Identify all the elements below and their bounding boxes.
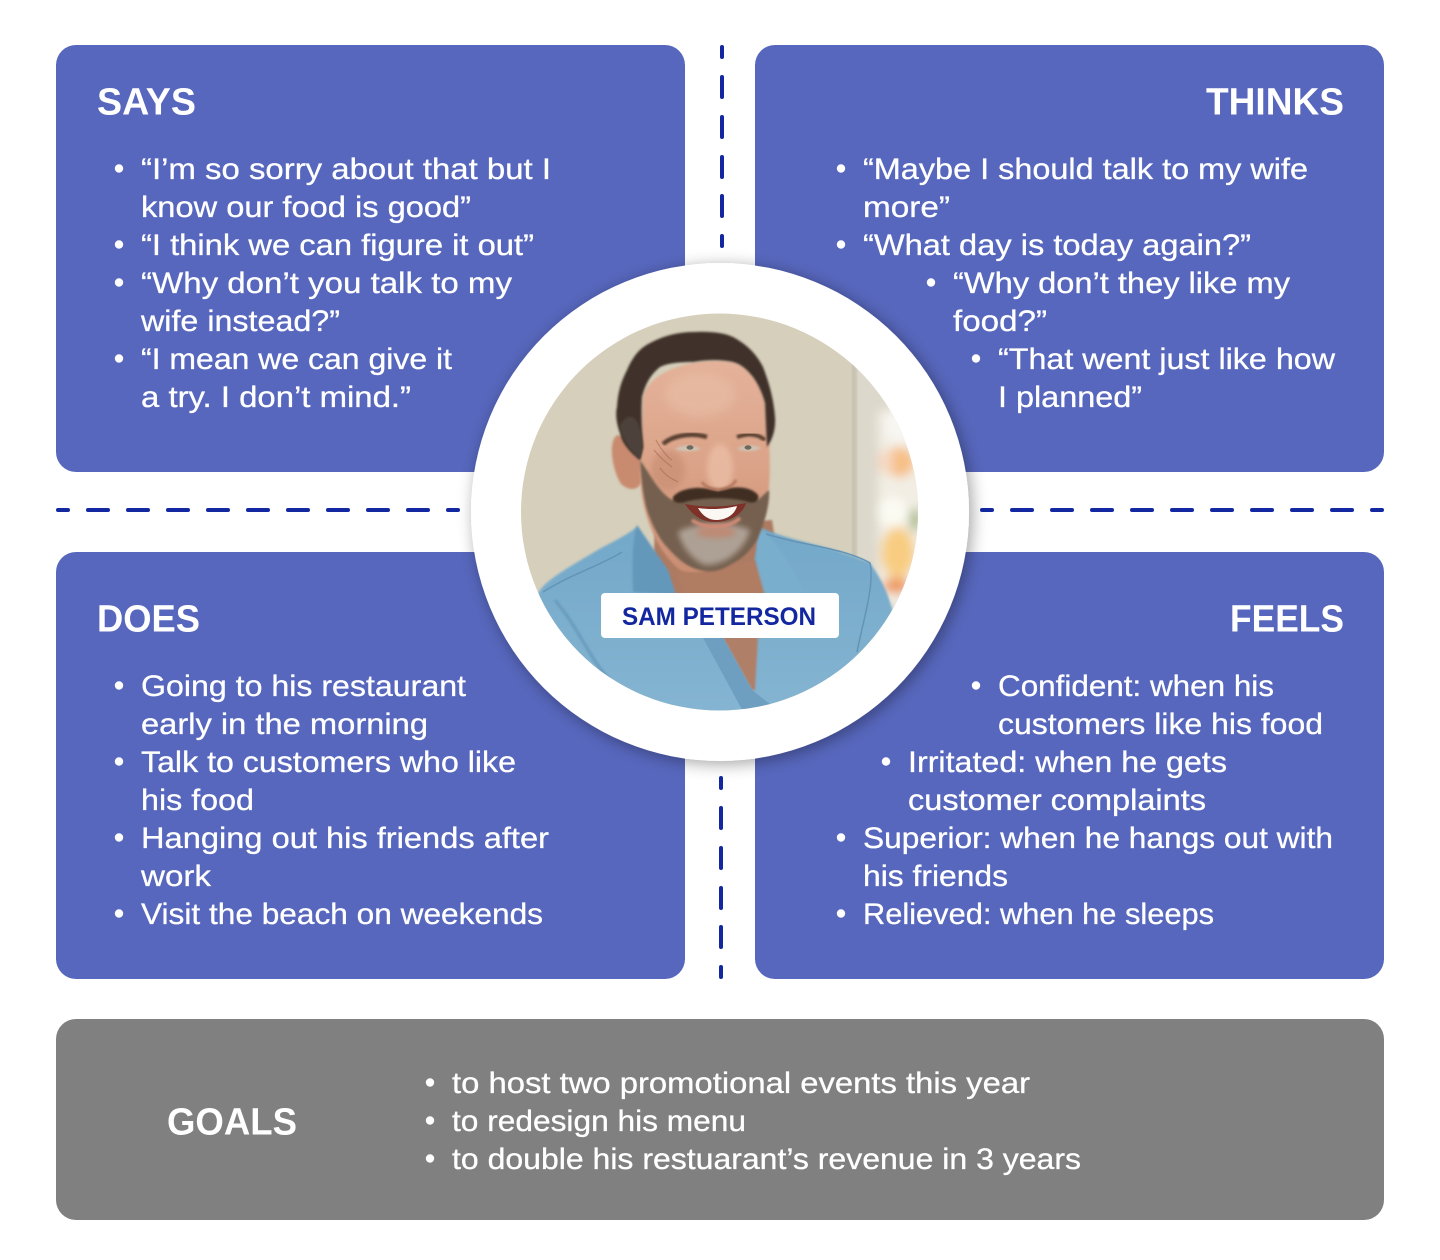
heading: says: SAYS xyxy=(97,82,196,124)
list: does items: Talk to customers who like xyxy=(141,746,516,779)
face xyxy=(640,361,770,572)
name label xyxy=(601,593,839,638)
list: says quotes: wife instead?” xyxy=(140,305,340,338)
heading: does: DOES xyxy=(97,598,200,640)
list: does items: Going to his restaurant xyxy=(141,670,467,703)
list: does items: work xyxy=(140,860,212,893)
list: feels items xyxy=(837,670,1333,931)
list: feels items: Irritated: when he gets xyxy=(908,746,1227,779)
divider: horizontal dashes left xyxy=(56,508,460,512)
panel: goals xyxy=(56,1019,1384,1220)
shirt xyxy=(537,527,896,720)
list: says quotes: a try. I don’t mind.” xyxy=(141,381,411,414)
list: thinks quotes: “Maybe I should talk to my wife xyxy=(863,153,1308,186)
beard xyxy=(640,460,769,571)
mouth xyxy=(685,503,746,522)
list: does items: early in the morning xyxy=(141,708,428,741)
divider: horizontal dashes right xyxy=(980,508,1384,512)
nose xyxy=(702,480,736,489)
list: feels items: customers like his food xyxy=(998,708,1323,741)
list: feels items: Confident: when his xyxy=(998,670,1274,703)
list: says quotes: “I mean we can give it xyxy=(141,343,453,376)
hair xyxy=(616,332,775,460)
panel: thinks xyxy=(755,45,1384,472)
list: says quotes: “I’m so sorry about that but I xyxy=(141,153,551,186)
list: thinks quotes: “What day is today again?” xyxy=(863,229,1251,262)
divider: vertical dashes bottom xyxy=(719,776,723,979)
panel: does xyxy=(56,552,685,979)
list: thinks quotes: I planned” xyxy=(998,381,1142,414)
list: says quotes xyxy=(115,153,551,414)
eyes and brows xyxy=(663,435,707,444)
list: feels items: Superior: when he hangs out with xyxy=(863,822,1333,855)
divider: vertical dashes top xyxy=(720,45,724,248)
list: says quotes: know our food is good” xyxy=(141,191,471,224)
list: does items xyxy=(115,670,549,931)
name label: SAM PETERSON xyxy=(622,603,816,631)
list: does items: Hanging out his friends after xyxy=(141,822,549,855)
list: thinks quotes: food?” xyxy=(953,305,1047,338)
heading: thinks: THINKS xyxy=(1206,82,1344,124)
list: goals items: to double his restuarant’s revenue in 3 years xyxy=(452,1143,1081,1176)
list: goals items: to redesign his menu xyxy=(452,1105,746,1138)
list: does items: his food xyxy=(141,784,254,817)
ear xyxy=(612,435,642,489)
list: goals items: to host two promotional events this year xyxy=(452,1067,1030,1100)
panel: feels xyxy=(755,552,1384,979)
list: goals items xyxy=(426,1067,1081,1176)
panel: says xyxy=(56,45,685,472)
portrait photo: Sam Peterson xyxy=(520,312,924,720)
heading: feels: FEELS xyxy=(1230,598,1344,640)
list: feels items: his friends xyxy=(863,860,1008,893)
chest opening xyxy=(722,636,758,690)
white circle frame xyxy=(471,263,969,761)
list: thinks quotes: “That went just like how xyxy=(998,343,1335,376)
moustache xyxy=(673,487,758,503)
list: feels items: Relieved: when he sleeps xyxy=(863,898,1214,931)
list: thinks quotes: “Why don’t they like my xyxy=(953,267,1290,300)
list: does items: Visit the beach on weekends xyxy=(141,898,543,931)
list: feels items: customer complaints xyxy=(908,784,1206,817)
list: says quotes: “Why don’t you talk to my xyxy=(141,267,512,300)
heading: goals: GOALS xyxy=(167,1102,297,1144)
list: thinks quotes xyxy=(837,153,1335,414)
list: thinks quotes: more” xyxy=(863,191,950,224)
neck xyxy=(652,518,775,593)
list: says quotes: “I think we can figure it out” xyxy=(141,229,534,262)
